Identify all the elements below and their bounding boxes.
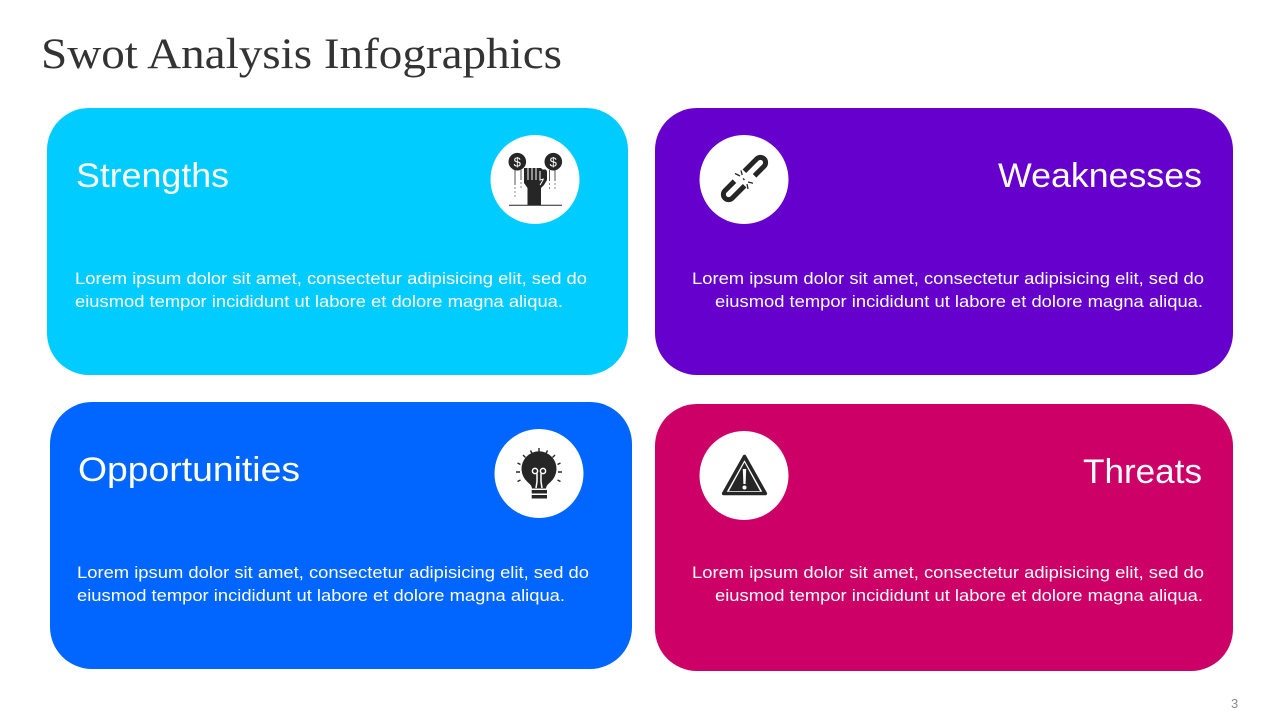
icon: fist with coins: $ (514, 154, 522, 169)
icon: fist with coins (490, 135, 580, 224)
icon: broken chain (700, 135, 788, 224)
panel: weaknesses (655, 108, 1233, 375)
text block: strengths: eiusmod tempor incididunt ut labore et dolore magna aliqua. (75, 293, 563, 311)
text block: threats (692, 564, 1204, 605)
page number: 3 (1231, 696, 1238, 711)
heading: threats: Threats (1083, 453, 1202, 491)
heading: weaknesses: Weaknesses (998, 157, 1202, 195)
text block: weaknesses: eiusmod tempor incididunt ut labore et dolore magna aliqua. (715, 293, 1203, 311)
icon: warning triangle (700, 431, 788, 520)
text block: weaknesses (692, 270, 1204, 311)
panel: threats (655, 404, 1233, 671)
text block: threats: Lorem ipsum dolor sit amet, consectetur adipisicing elit, sed do (692, 564, 1204, 582)
text block: opportunities: Lorem ipsum dolor sit amet, consectetur adipisicing elit, sed do (77, 564, 589, 582)
text block: opportunities (77, 564, 589, 605)
text block: strengths: Lorem ipsum dolor sit amet, consectetur adipisicing elit, sed do (75, 270, 587, 288)
text block: threats: eiusmod tempor incididunt ut labore et dolore magna aliqua. (715, 587, 1203, 605)
panel: strengths (47, 108, 628, 375)
panel: opportunities (50, 402, 632, 669)
text block: strengths (75, 270, 587, 311)
title: Swot Analysis Infographics (41, 31, 562, 78)
text block: opportunities: eiusmod tempor incididunt ut labore et dolore magna aliqua. (77, 587, 565, 605)
icon: fist with coins: $ (550, 154, 558, 169)
heading: strengths: Strengths (76, 157, 229, 195)
heading: opportunities: Opportunities (78, 451, 300, 489)
icon: light bulb (494, 429, 584, 518)
text block: weaknesses: Lorem ipsum dolor sit amet, consectetur adipisicing elit, sed do (692, 270, 1204, 288)
